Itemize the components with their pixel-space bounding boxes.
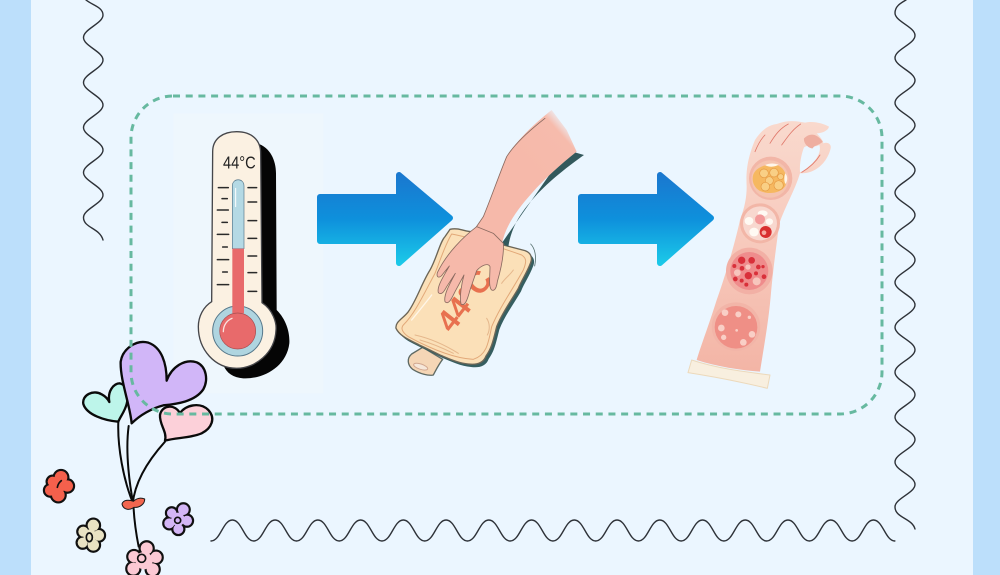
purple heart balloon bbox=[121, 342, 206, 423]
balloon strings bbox=[118, 422, 165, 547]
hand bbox=[437, 227, 503, 305]
burned forearm with four degrees of lesions bbox=[688, 121, 831, 388]
pinched fingers bbox=[804, 135, 823, 148]
bag seam bbox=[402, 234, 526, 359]
red flower bbox=[45, 471, 73, 501]
bag temperature text: 44°C bbox=[430, 263, 499, 338]
hot water bag and hand bbox=[396, 110, 584, 375]
mercury bulb bbox=[220, 313, 256, 349]
mercury bbox=[232, 249, 244, 313]
right side band bbox=[973, 0, 1000, 575]
wavy line: right bbox=[895, 0, 915, 529]
teal heart balloon bbox=[83, 383, 128, 422]
left side band bbox=[0, 0, 31, 575]
gap between thumb and fingers bbox=[800, 145, 820, 172]
lesion 2: white blisters bbox=[740, 203, 780, 243]
arrow 2 bbox=[581, 175, 711, 263]
arm outline bbox=[476, 118, 545, 227]
bag neck bbox=[408, 347, 443, 375]
lesion 3: red spots bbox=[726, 248, 773, 294]
purple flower bbox=[164, 504, 192, 534]
arm bbox=[475, 110, 577, 245]
cuff bbox=[688, 360, 770, 388]
forearm and hand bbox=[697, 121, 831, 372]
tube upper bbox=[232, 180, 244, 249]
lesion 4: pale spots bbox=[712, 302, 760, 351]
wavy line: left bbox=[84, 0, 103, 240]
motion line bbox=[531, 244, 536, 266]
wavy line: bottom bbox=[211, 520, 895, 541]
balloon bouquet with flowers bbox=[45, 342, 212, 575]
bag body bbox=[396, 229, 531, 364]
thermometer body bbox=[198, 132, 276, 368]
temperature label: 44°C bbox=[223, 153, 256, 173]
dashed frame bbox=[131, 96, 882, 414]
cream flower bbox=[78, 520, 104, 551]
bag wrinkles bbox=[415, 270, 513, 353]
lesion 1: yellow bbox=[749, 157, 792, 200]
pink flower bbox=[127, 542, 162, 575]
thermometer bbox=[173, 113, 323, 393]
bow bbox=[122, 498, 145, 509]
arm shadow bbox=[502, 150, 584, 247]
arrow 1 bbox=[320, 175, 450, 263]
thermometer shadow bbox=[223, 143, 289, 378]
tick marks bbox=[217, 188, 257, 291]
pink heart balloon bbox=[160, 405, 212, 441]
bag shadow bbox=[399, 232, 534, 367]
knuckle creases bbox=[755, 124, 820, 172]
bulb ring bbox=[213, 306, 263, 356]
